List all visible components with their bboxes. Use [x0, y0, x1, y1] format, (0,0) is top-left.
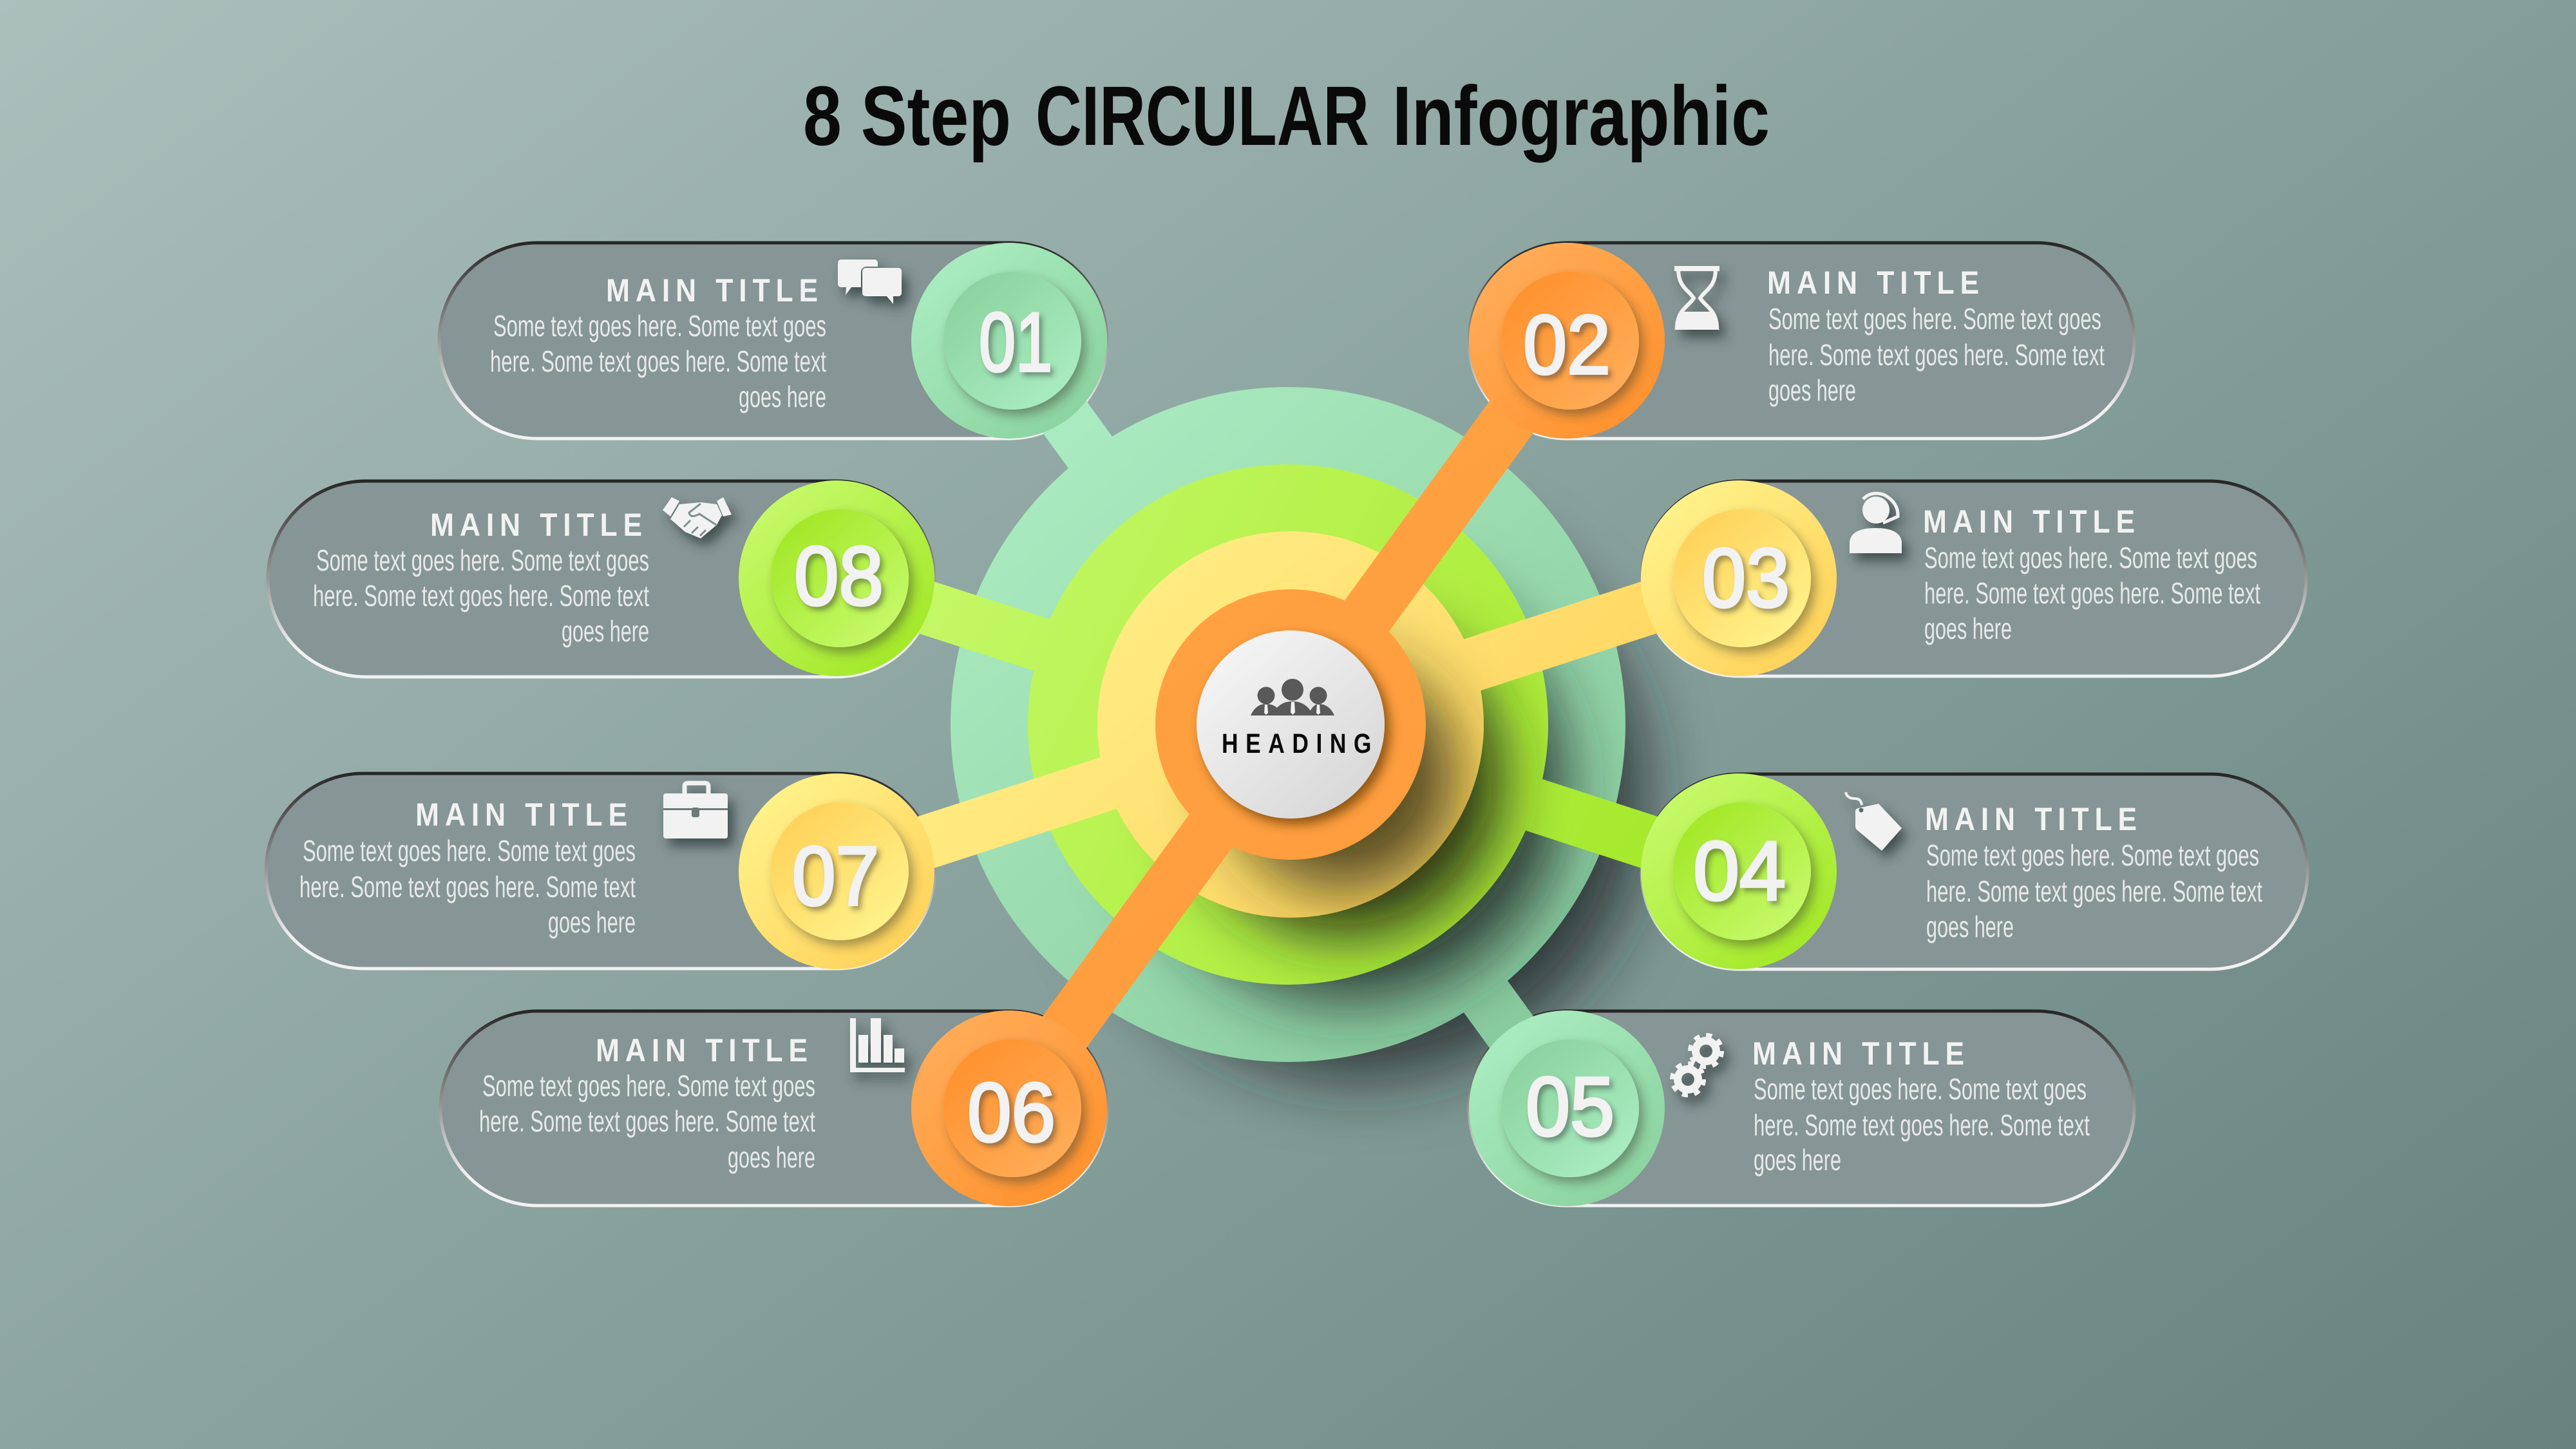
step 03: 03 [1702, 531, 1790, 625]
step 01 [911, 243, 1107, 439]
text block: step 01: goes here [739, 380, 826, 413]
text block: step 04: Some text goes here. Some text goes [1926, 838, 2259, 872]
step 06: 06 [967, 1065, 1056, 1159]
step 05 [1469, 1010, 1665, 1206]
text block: step 01: Some text goes here. Some text goes [493, 309, 826, 343]
text block: step 06: here. Some text goes here. Some text [479, 1104, 815, 1138]
text block: step 07: Some text goes here. Some text goes [303, 834, 636, 867]
text block: step 03: here. Some text goes here. Some text [1924, 576, 2260, 610]
shadow of orange ring [1226, 660, 1458, 892]
step 04 [1641, 773, 1837, 969]
text block: step 05: goes here [1754, 1143, 1841, 1177]
text block: step 04: goes here [1926, 910, 2014, 943]
text block: step 04 [1925, 801, 2262, 943]
step 01: 01 [979, 295, 1052, 389]
icon: gears [1672, 1036, 1721, 1095]
text block: step 01: here. Some text goes here. Some text [490, 345, 826, 378]
text block: step 06: Some text goes here. Some text goes [482, 1069, 815, 1103]
text block: step 02 [1767, 265, 2105, 407]
text block: step 03: goes here [1924, 612, 2012, 645]
hub: yellow ring with connectors to steps 03 and 07 [837, 531, 1739, 918]
step 02: 02 [1523, 298, 1611, 392]
text block: step 05: Some text goes here. Some text goes [1754, 1072, 2087, 1106]
text block: step 05: here. Some text goes here. Some text [1754, 1108, 2090, 1142]
info pills [266, 243, 2307, 1206]
text block: step 08: MAIN TITLE [430, 507, 648, 543]
step 02 [1469, 243, 1665, 439]
icon: briefcase [663, 783, 728, 838]
title: CIRCULAR [1036, 68, 1369, 163]
shadow of lime disc [1130, 567, 1568, 1005]
text block: step 08: goes here [562, 614, 649, 648]
text block: step 08 [313, 507, 649, 648]
step 06 [911, 1010, 1107, 1206]
text block: step 06 [479, 1032, 815, 1174]
central heading disc [1197, 630, 1385, 819]
text block: step 04: here. Some text goes here. Some text [1926, 875, 2262, 908]
hub: lime ring with connectors to steps 04 and 08 [837, 464, 1739, 985]
icon: chat bubbles [838, 260, 902, 304]
shadow of outer disc [1069, 502, 1649, 1082]
step 05: 05 [1526, 1059, 1615, 1153]
hub: orange ring with connectors to steps 02 and 06 [1009, 341, 1567, 1108]
text block: step 04: MAIN TITLE [1925, 801, 2143, 837]
icon: hourglass [1674, 266, 1719, 330]
title: 8 Step [803, 68, 1011, 163]
icon: headset operator [1850, 493, 1902, 553]
text block: step 02: Some text goes here. Some text goes [1768, 302, 2101, 336]
text block: step 03: Some text goes here. Some text goes [1924, 541, 2257, 574]
text block: step 07: goes here [548, 905, 636, 939]
text block: step 05: MAIN TITLE [1752, 1036, 1970, 1072]
text block: step 08: Some text goes here. Some text goes [316, 544, 649, 577]
icon: team of people [1251, 679, 1334, 715]
text block: step 03: MAIN TITLE [1923, 504, 2141, 540]
text block: step 02: MAIN TITLE [1767, 265, 1985, 301]
hub: mint ring with connectors to steps 01 and 05 [951, 341, 1625, 1108]
text block: step 07: MAIN TITLE [415, 797, 633, 833]
step 03 [1641, 480, 1837, 676]
step 08 [739, 480, 934, 676]
title [803, 68, 1770, 163]
text block: step 05 [1752, 1036, 2090, 1177]
text block: step 01 [490, 272, 826, 413]
text block: step 06: goes here [728, 1141, 815, 1174]
icon: handshake [663, 497, 732, 538]
text block: step 06: MAIN TITLE [596, 1032, 813, 1068]
icon: bar chart [850, 1018, 905, 1072]
step 07 [739, 773, 934, 969]
text block: step 02: here. Some text goes here. Some text [1768, 338, 2105, 372]
step 04: 04 [1693, 824, 1786, 918]
step 07: 07 [792, 829, 879, 923]
text block: step 02: goes here [1768, 374, 1856, 407]
text block: step 07: here. Some text goes here. Some text [299, 870, 636, 904]
text block: step 07 [299, 797, 636, 939]
step 08: 08 [794, 529, 884, 623]
heading label: HEADING [1222, 728, 1379, 759]
title: Infographic [1392, 68, 1770, 163]
icon: price tag [1846, 792, 1902, 851]
text block: step 01: MAIN TITLE [606, 272, 824, 308]
text block: step 08: here. Some text goes here. Some text [313, 579, 649, 612]
text block: step 03 [1923, 504, 2260, 645]
shadow of yellow disc [1188, 621, 1503, 937]
